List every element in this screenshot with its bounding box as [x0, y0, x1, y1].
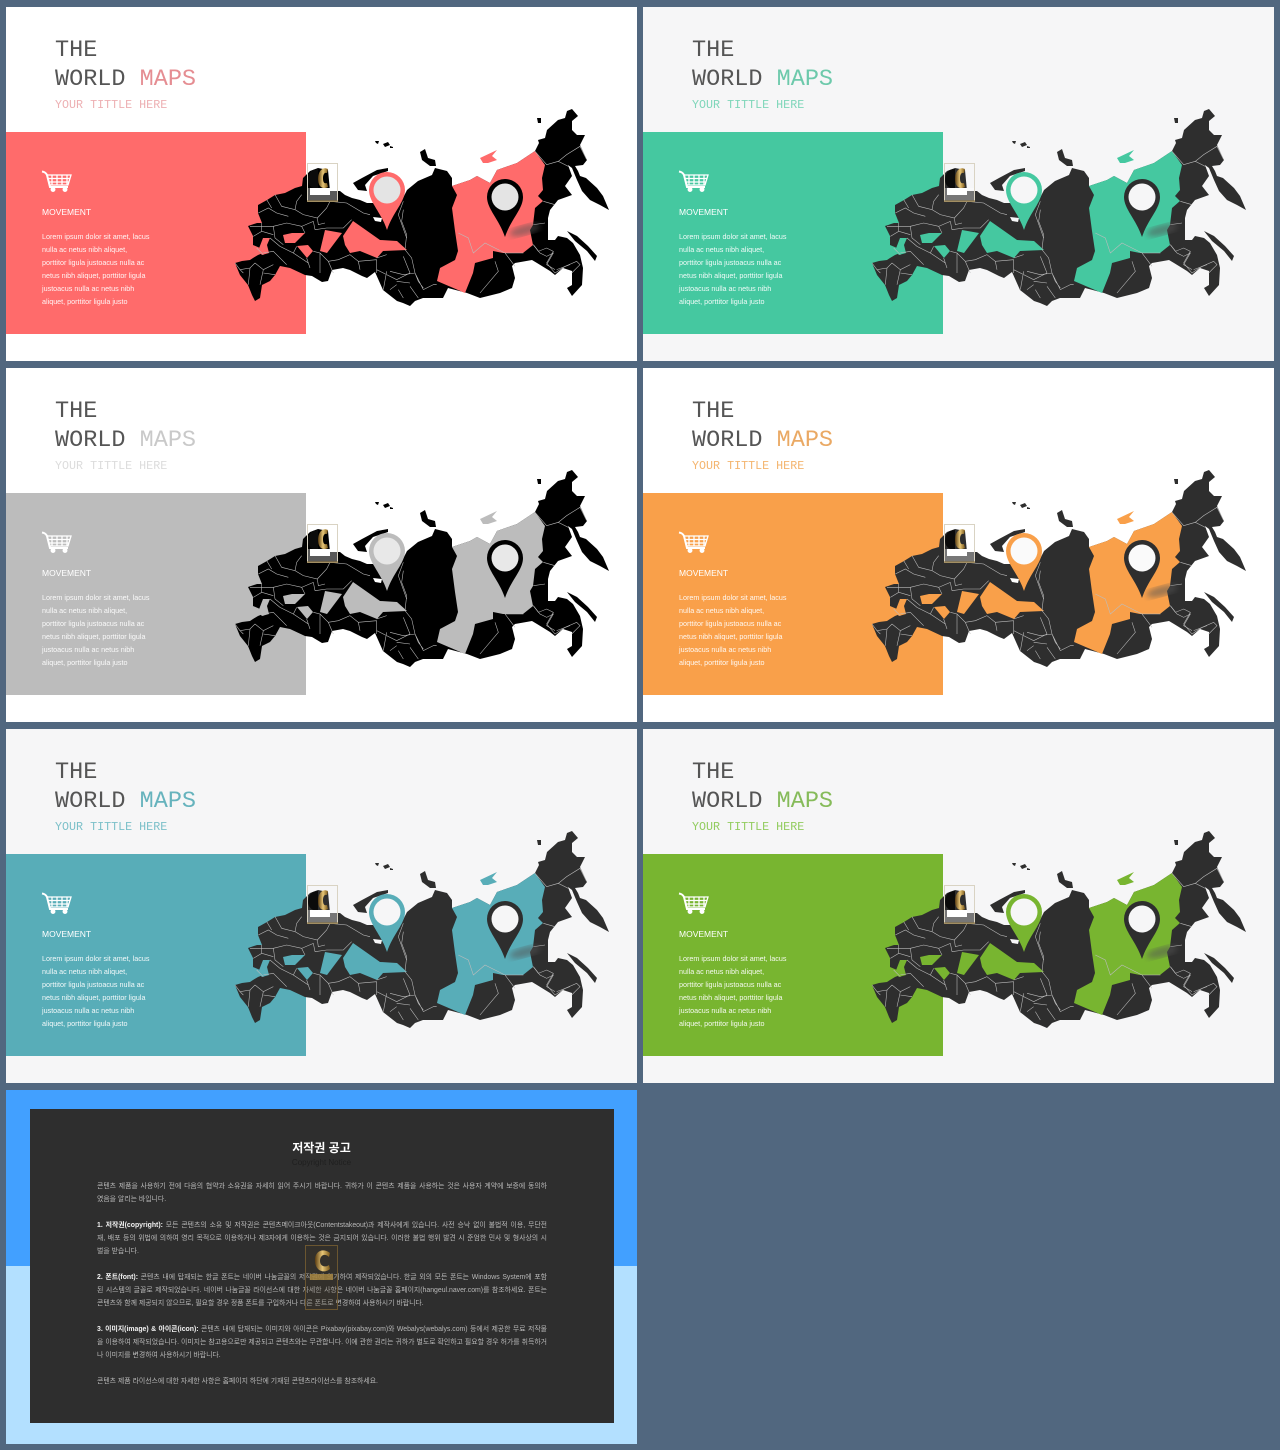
- panel: slide 6 lime: [643, 729, 1274, 1083]
- pin: dark: [1124, 540, 1179, 600]
- logo stamp: [307, 524, 338, 563]
- subtitle: YOUR TITTLE HERE: [692, 820, 804, 834]
- text block: image and icon: [97, 1325, 547, 1359]
- logo stamp: [944, 524, 975, 563]
- title: the world maps: THE: [55, 398, 97, 425]
- body text: [678, 593, 787, 667]
- title: the world maps: [692, 37, 833, 93]
- body text: netus nibh aliquet, porttitor ligula: [42, 271, 146, 280]
- map of russia: [235, 470, 609, 667]
- subtitle: YOUR TITTLE HERE: [692, 98, 804, 112]
- pin: accent: [1006, 172, 1042, 230]
- body text: [41, 954, 150, 1028]
- panel: slide 4 orange: [643, 368, 1274, 722]
- text block: image and icon: 나 이미지를 변경하여 사용하시기 바랍니다.: [97, 1352, 221, 1359]
- pin: accent: [369, 172, 405, 230]
- text block: closing line: 콘텐츠 제품 라이선스에 대한 자세한 사항은 홈페이지 하단에 기재된 콘텐츠라이선스를 참조하세요.: [97, 1378, 378, 1385]
- body text: porttitor ligula justoacus nulla ac: [42, 980, 145, 989]
- subtitle: YOUR TITTLE HERE: [55, 98, 167, 112]
- body text: aliquet, porttitor ligula justo: [679, 658, 765, 667]
- pin: accent: [1006, 533, 1042, 591]
- pin: dark: [487, 540, 523, 598]
- title: the world maps: WORLD MAPS: [692, 788, 833, 815]
- map of russia: [872, 109, 1246, 306]
- logo stamp: [944, 164, 975, 202]
- body text: nulla ac netus nibh aliquet,: [679, 245, 764, 254]
- pin: accent: [369, 894, 405, 952]
- pin: dark: [487, 901, 542, 961]
- body text: nulla ac netus nibh aliquet,: [679, 967, 764, 976]
- title: the world maps: [55, 759, 196, 815]
- body text: porttitor ligula justoacus nulla ac: [679, 258, 782, 267]
- body text: justoacus nulla ac netus nibh: [41, 645, 134, 654]
- colour block: [6, 854, 306, 1056]
- body text: justoacus nulla ac netus nibh: [678, 284, 771, 293]
- body text: justoacus nulla ac netus nibh: [678, 1006, 771, 1015]
- icon: shopping cart: [679, 172, 708, 191]
- logo stamp: [944, 886, 975, 924]
- title: the world maps: WORLD MAPS: [55, 66, 196, 93]
- text block: image and icon: 3. 이미지(image) & 아이콘(icon): 콘텐츠 내에 탑재되는 이미지와 아이콘은 Pixabay(pixabay.com)와 Webalys(webalys.com) 등에서 제공한 무료 저작물: [97, 1326, 547, 1333]
- icon: shopping cart: [679, 894, 708, 913]
- body text: netus nibh aliquet, porttitor ligula: [42, 993, 146, 1002]
- body text: nulla ac netus nibh aliquet,: [42, 606, 127, 615]
- text block: copyright: 벌을 받습니다.: [97, 1248, 139, 1255]
- title: the world maps: WORLD MAPS: [55, 788, 196, 815]
- heading: movement: MOVEMENT: [679, 929, 728, 939]
- panel: copyright notice: [6, 1090, 637, 1444]
- body text: netus nibh aliquet, porttitor ligula: [679, 271, 782, 280]
- title: the world maps: THE: [55, 37, 97, 64]
- title: the world maps: [692, 398, 833, 454]
- heading: movement: MOVEMENT: [42, 207, 91, 217]
- panel: slide 2 green: [643, 7, 1274, 361]
- icon: shopping cart: [42, 894, 71, 913]
- text block: copyright: 1. 저작권(copyright): 모든 콘텐츠의 소유 및 저작권은 콘텐츠메이크아웃(Contentstakeout)과 제작사에게 있습니다. 사전 승낙 없이 불법적 이용, 무단전: [97, 1222, 547, 1229]
- body text: nulla ac netus nibh aliquet,: [679, 606, 764, 615]
- body text: Lorem ipsum dolor sit amet, lacus: [42, 593, 150, 602]
- text block: font: [97, 1273, 547, 1307]
- text block: intro: [97, 1182, 547, 1203]
- body text: Lorem ipsum dolor sit amet, lacus: [42, 232, 150, 241]
- text block: intro: 콘텐츠 제품을 사용하기 전에 다음의 협약과 소유권을 자세히 읽어 주시기 바랍니다. 귀하가 이 콘텐츠 제품을 사용하는 것은 사용자 계약에 보증에 동의하: [97, 1183, 547, 1190]
- body text: justoacus nulla ac netus nibh: [41, 284, 134, 293]
- pin: dark: [1124, 901, 1179, 961]
- body text: netus nibh aliquet, porttitor ligula: [679, 993, 782, 1002]
- text block: copyright: [97, 1221, 547, 1255]
- logo stamp: [307, 886, 338, 924]
- map of russia: [235, 831, 609, 1028]
- icon: shopping cart: [42, 172, 71, 191]
- heading: copyright notice: 저작권 공고: [292, 1141, 351, 1155]
- body text: Lorem ipsum dolor sit amet, lacus: [679, 954, 787, 963]
- title: the world maps: [55, 398, 196, 454]
- body text: nulla ac netus nibh aliquet,: [42, 967, 127, 976]
- body text: [678, 232, 787, 306]
- colour block: [6, 493, 306, 695]
- body text: Lorem ipsum dolor sit amet, lacus: [42, 954, 150, 963]
- icon: shopping cart: [42, 532, 71, 552]
- pin: dark: [487, 179, 542, 239]
- title: the world maps: WORLD MAPS: [55, 427, 196, 454]
- body text: porttitor ligula justoacus nulla ac: [42, 619, 145, 628]
- logo stamp: [307, 164, 338, 202]
- colour block: [643, 854, 943, 1056]
- body text: porttitor ligula justoacus nulla ac: [679, 980, 782, 989]
- colour block: [643, 493, 943, 695]
- map of russia: [872, 831, 1246, 1028]
- pin: accent: [1006, 894, 1042, 952]
- map of russia: [235, 109, 609, 306]
- icon: shopping cart: [679, 532, 708, 552]
- body text: aliquet, porttitor ligula justo: [42, 658, 128, 667]
- title: the world maps: [55, 37, 196, 93]
- panel: slide 5 teal: [6, 729, 637, 1083]
- title: the world maps: THE: [692, 398, 734, 425]
- heading: movement: MOVEMENT: [42, 568, 91, 578]
- body text: justoacus nulla ac netus nibh: [678, 645, 771, 654]
- title: the world maps: [692, 759, 833, 815]
- subheading: Copyright Notice: [292, 1158, 351, 1167]
- body text: porttitor ligula justoacus nulla ac: [679, 619, 782, 628]
- text block: font: 2. 폰트(font): 콘텐츠 내에 탑재되는 한글 폰트는 네이버 나눔글꼴의 저작권에 의거하여 제작되었습니다. 한글 외의 모든 폰트는 Windows System에 포함: [97, 1274, 547, 1281]
- text block: intro: 였음을 알리는 바입니다.: [97, 1196, 166, 1203]
- text block: copyright: 재, 배포 등의 위법에 의하여 영리 목적으로 이용하거나 제3자에게 이용하는 것은 금지되어 있습니다. 이러한 불법 행위 발견 시 준엄한 민사 및 형사상의 시: [97, 1235, 547, 1242]
- body text: Lorem ipsum dolor sit amet, lacus: [679, 232, 787, 241]
- subtitle: YOUR TITTLE HERE: [55, 820, 167, 834]
- colour block: [6, 132, 306, 334]
- panel: slide 1 red: [6, 7, 637, 361]
- panel: slide 3 grey: [6, 368, 637, 722]
- title: the world maps: THE: [692, 759, 734, 786]
- subtitle: YOUR TITTLE HERE: [55, 459, 167, 473]
- title: the world maps: WORLD MAPS: [692, 66, 833, 93]
- body text: aliquet, porttitor ligula justo: [42, 297, 128, 306]
- body text: aliquet, porttitor ligula justo: [679, 1019, 765, 1028]
- heading: movement: MOVEMENT: [679, 207, 728, 217]
- body text: [41, 232, 150, 306]
- title: the world maps: WORLD MAPS: [692, 427, 833, 454]
- heading: movement: MOVEMENT: [42, 929, 91, 939]
- body text: netus nibh aliquet, porttitor ligula: [42, 632, 146, 641]
- body text: justoacus nulla ac netus nibh: [41, 1006, 134, 1015]
- text block: font: 된 시스템의 글꼴로 제작되었습니다. 네이버 나눔글꼴 라이선스에 대한 자세한 사항은 네이버 나눔글꼴 홈페이지(hangeul.naver.com)를 참조하세요. 폰트는: [97, 1287, 547, 1294]
- logo stamp: [305, 1245, 338, 1310]
- body text: aliquet, porttitor ligula justo: [679, 297, 765, 306]
- text block: font: 콘텐츠와 함께 제공되지 않으므로, 필요할 경우 정품 폰트를 구입하거나 다른 폰트로 변경하여 사용하시기 바랍니다.: [97, 1300, 424, 1307]
- text block: image and icon: 을 이용하여 제작되었습니다. 이미지는 참고용으로만 제공되고 콘텐츠와는 무관합니다. 이에 관한 권리는 귀하가 별도로 확인하고 필요할 경우 허가를 취득하거: [97, 1339, 547, 1346]
- heading: movement: MOVEMENT: [679, 568, 728, 578]
- map of russia: [872, 470, 1246, 667]
- pin: accent: [369, 533, 405, 591]
- body text: [41, 593, 150, 667]
- title: the world maps: THE: [55, 759, 97, 786]
- subtitle: YOUR TITTLE HERE: [692, 459, 804, 473]
- body text: netus nibh aliquet, porttitor ligula: [679, 632, 782, 641]
- colour block: [643, 132, 943, 334]
- body text: [678, 954, 787, 1028]
- body text: Lorem ipsum dolor sit amet, lacus: [679, 593, 787, 602]
- title: the world maps: THE: [692, 37, 734, 64]
- body text: aliquet, porttitor ligula justo: [42, 1019, 128, 1028]
- body text: nulla ac netus nibh aliquet,: [42, 245, 127, 254]
- body text: porttitor ligula justoacus nulla ac: [42, 258, 145, 267]
- pin: dark: [1124, 179, 1179, 239]
